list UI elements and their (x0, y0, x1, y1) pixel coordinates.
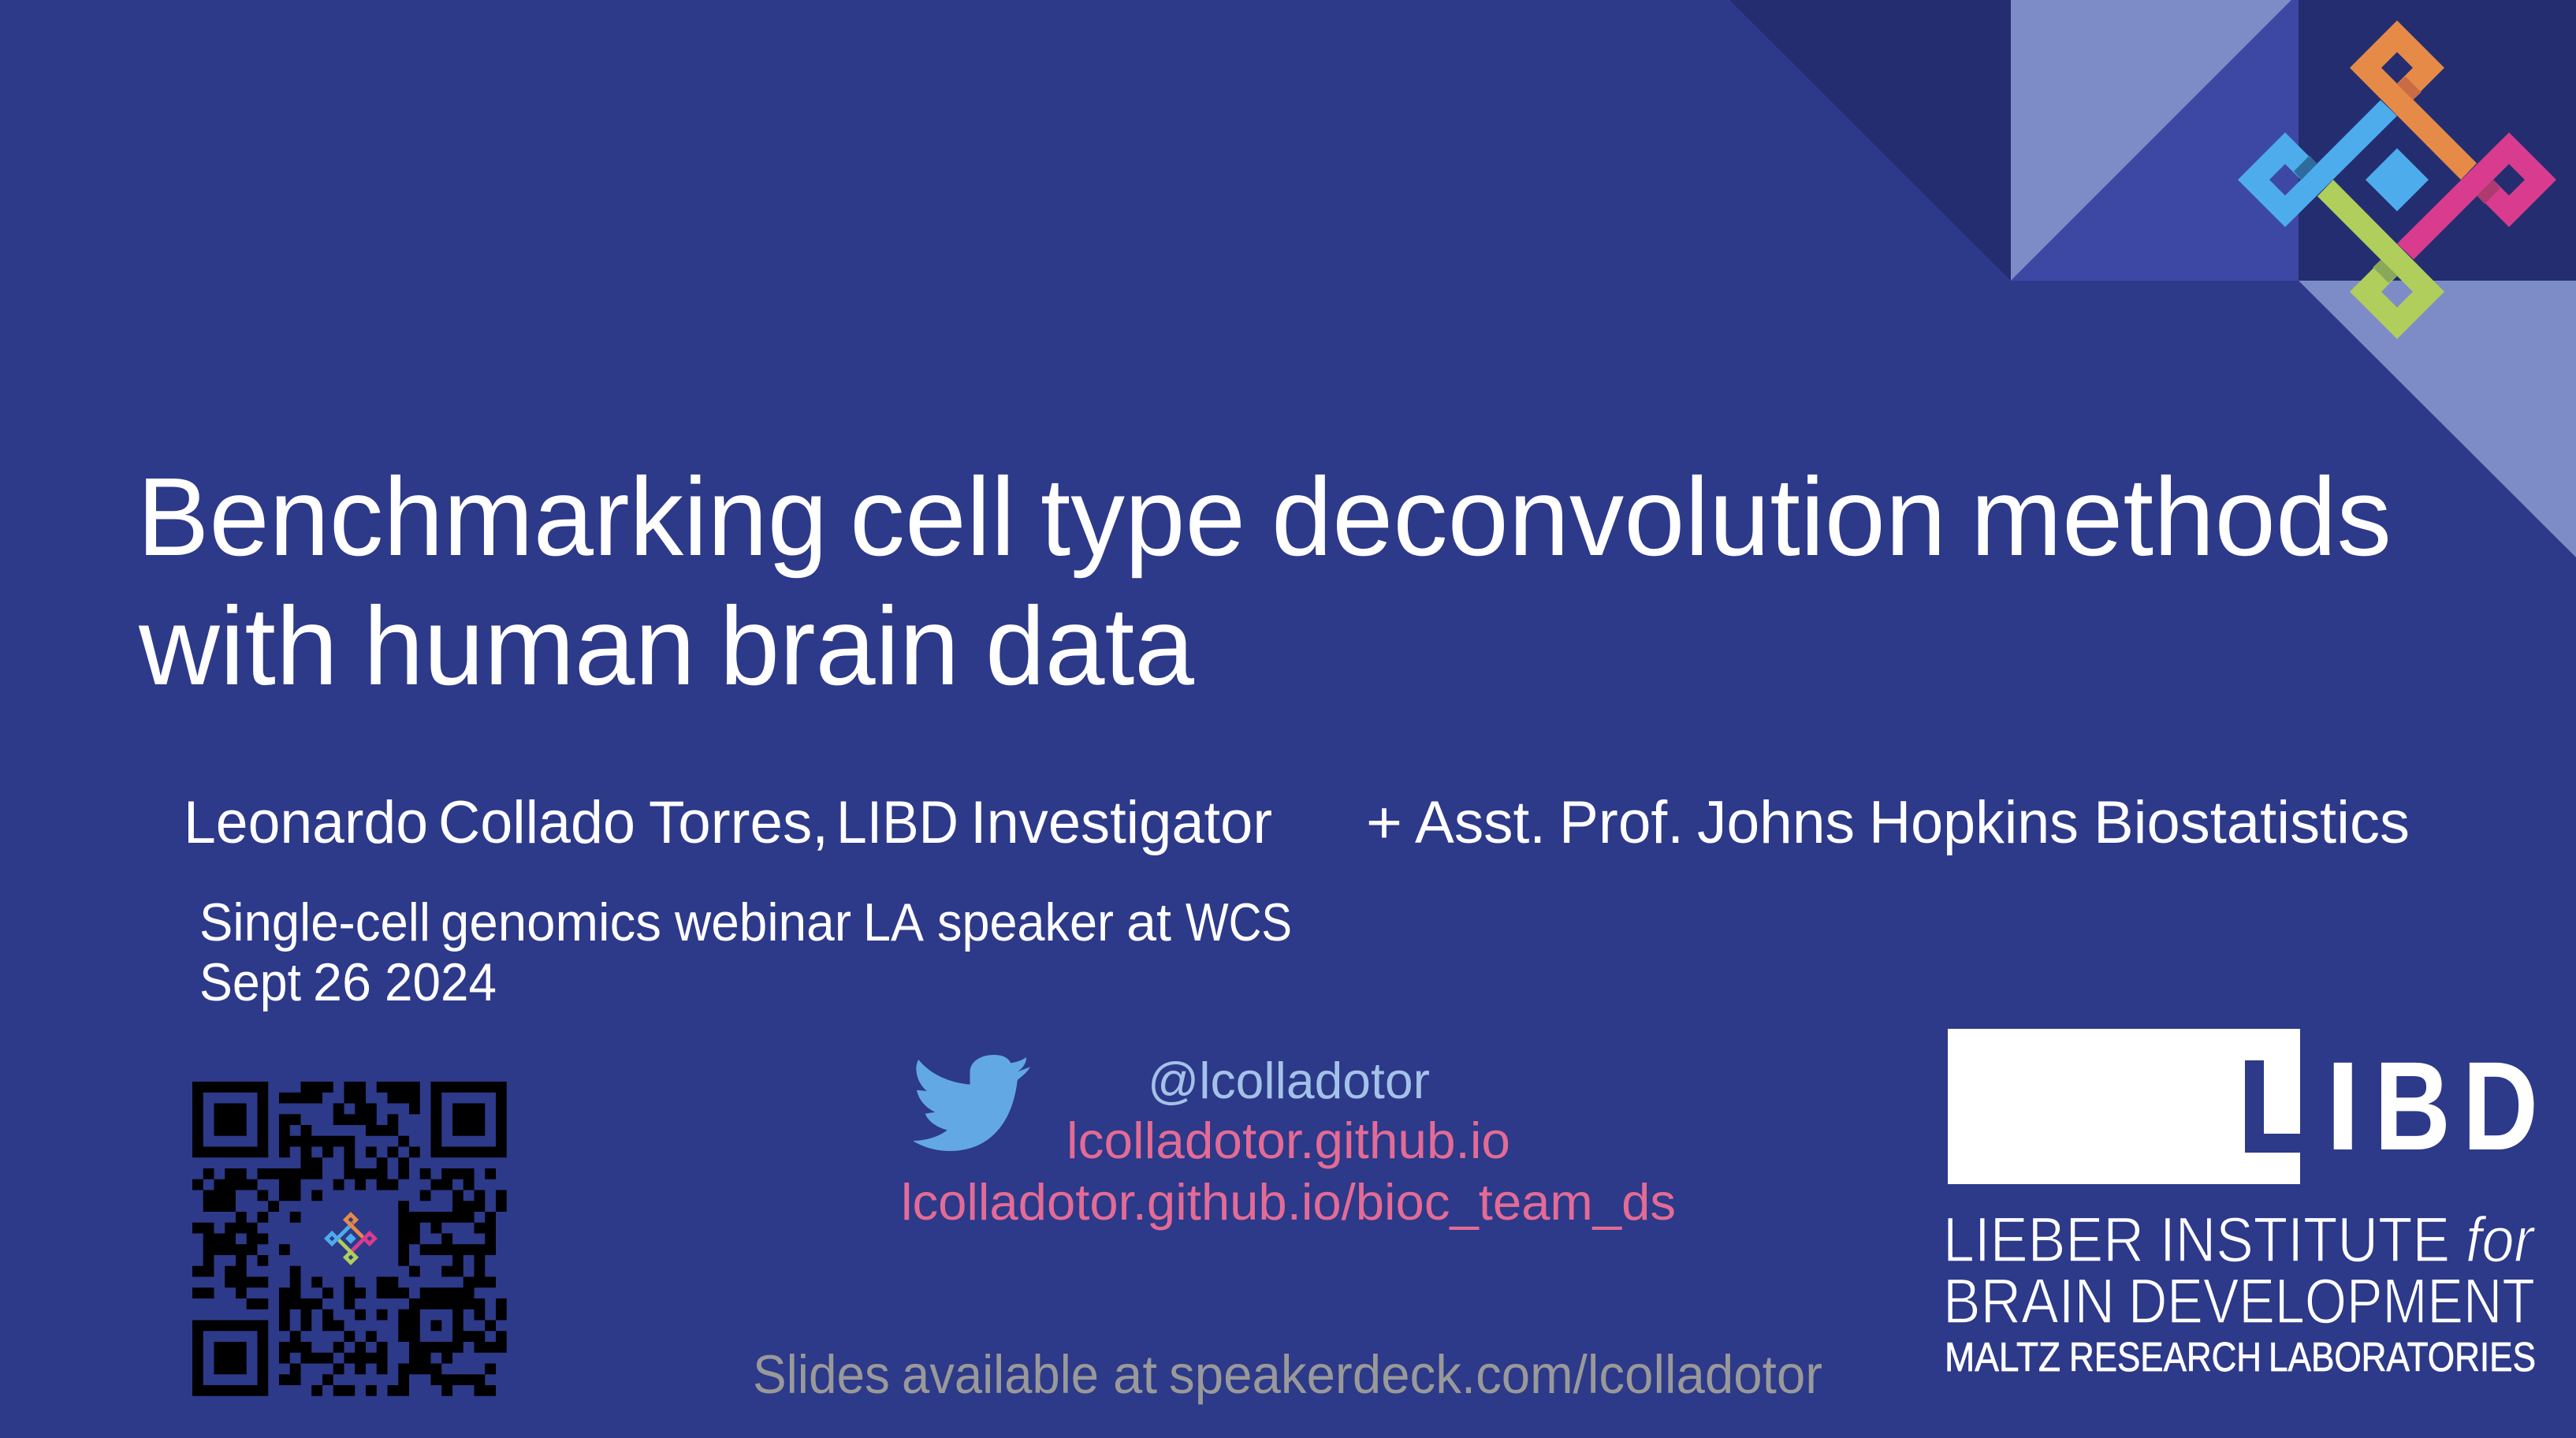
speaker name: LIBD (836, 789, 959, 856)
institute name (1943, 1205, 2536, 1337)
icon: twitter bird (913, 1055, 1030, 1151)
title (137, 454, 2392, 708)
logo letters: D (2462, 1035, 2538, 1176)
event details: speaker (937, 892, 1114, 952)
knot: centre diamond (2366, 148, 2429, 211)
title: type (1040, 454, 1245, 579)
title: brain (720, 583, 959, 708)
QR code (192, 1082, 507, 1396)
speaker name: Investigator (970, 789, 1272, 856)
title: deconvolution (1271, 454, 1946, 579)
knot: blue strand (2238, 100, 2397, 227)
institute name: INSTITUTE (2160, 1205, 2450, 1276)
speaker affiliation: Prof. (1559, 789, 1684, 856)
institute name: BRAIN (1943, 1266, 2115, 1337)
logo block with L (1948, 1029, 2300, 1184)
speaker name: Leonardo (184, 789, 428, 856)
speaker affiliation: Johns (1697, 789, 1855, 856)
event details: WCS (1186, 892, 1292, 952)
institute name: for (2466, 1205, 2536, 1276)
slides link: Slides (753, 1344, 890, 1405)
knot: green strand (2317, 180, 2444, 339)
event details: webinar (674, 892, 851, 952)
laboratory name: MALTZ (1945, 1335, 2060, 1380)
event details: 2024 (385, 952, 497, 1012)
icon: LIBD knot logo (2238, 20, 2556, 339)
speaker name: Collado (438, 789, 635, 856)
knot: orange strand (2350, 20, 2477, 180)
event details: Single-cell (199, 892, 430, 952)
slides link: available (902, 1344, 1099, 1405)
event details: at (1126, 892, 1171, 952)
slides link: at (1113, 1344, 1157, 1405)
team site link: lcolladotor.github.io/bioc_team_ds (901, 1173, 1676, 1231)
slides link (753, 1344, 1822, 1405)
speaker affiliation: Asst. (1415, 789, 1546, 856)
institute name: LIEBER (1943, 1205, 2144, 1276)
website link: lcolladotor.github.io (1067, 1112, 1510, 1169)
QR centre logo (324, 1212, 378, 1265)
laboratory name: LABORATORIES (2269, 1335, 2536, 1380)
logo letters: B (2374, 1035, 2451, 1176)
knot: pink strand (2397, 132, 2556, 259)
logo letters: I (2325, 1035, 2360, 1176)
speaker affiliation: Biostatistics (2094, 789, 2410, 856)
title: Benchmarking (137, 454, 828, 579)
twitter handle: @lcolladotor (1148, 1052, 1430, 1109)
LIBD logo (1943, 1029, 2538, 1380)
speaker affiliation: + (1366, 789, 1402, 856)
QR modules (192, 1082, 507, 1396)
event details: 26 (313, 952, 371, 1012)
corner geometric shapes (1729, 0, 2576, 557)
speaker name (184, 789, 1272, 856)
laboratory name (1945, 1335, 2536, 1380)
speaker affiliation (1366, 789, 2410, 856)
logo letters (2325, 1035, 2538, 1176)
laboratory name: RESEARCH (2069, 1335, 2261, 1380)
title: human (363, 583, 695, 708)
event details: Sept (199, 952, 301, 1012)
event details: genomics (441, 892, 661, 952)
speaker affiliation: Hopkins (1869, 789, 2079, 856)
title: data (985, 583, 1195, 708)
title: with (138, 583, 338, 708)
title: cell (850, 454, 1015, 579)
speaker name: Torres, (649, 789, 828, 856)
title: methods (1971, 454, 2392, 579)
event details: LA (863, 892, 925, 952)
event details (199, 892, 1292, 1012)
slides link: speakerdeck.com/lcolladotor (1169, 1344, 1822, 1405)
